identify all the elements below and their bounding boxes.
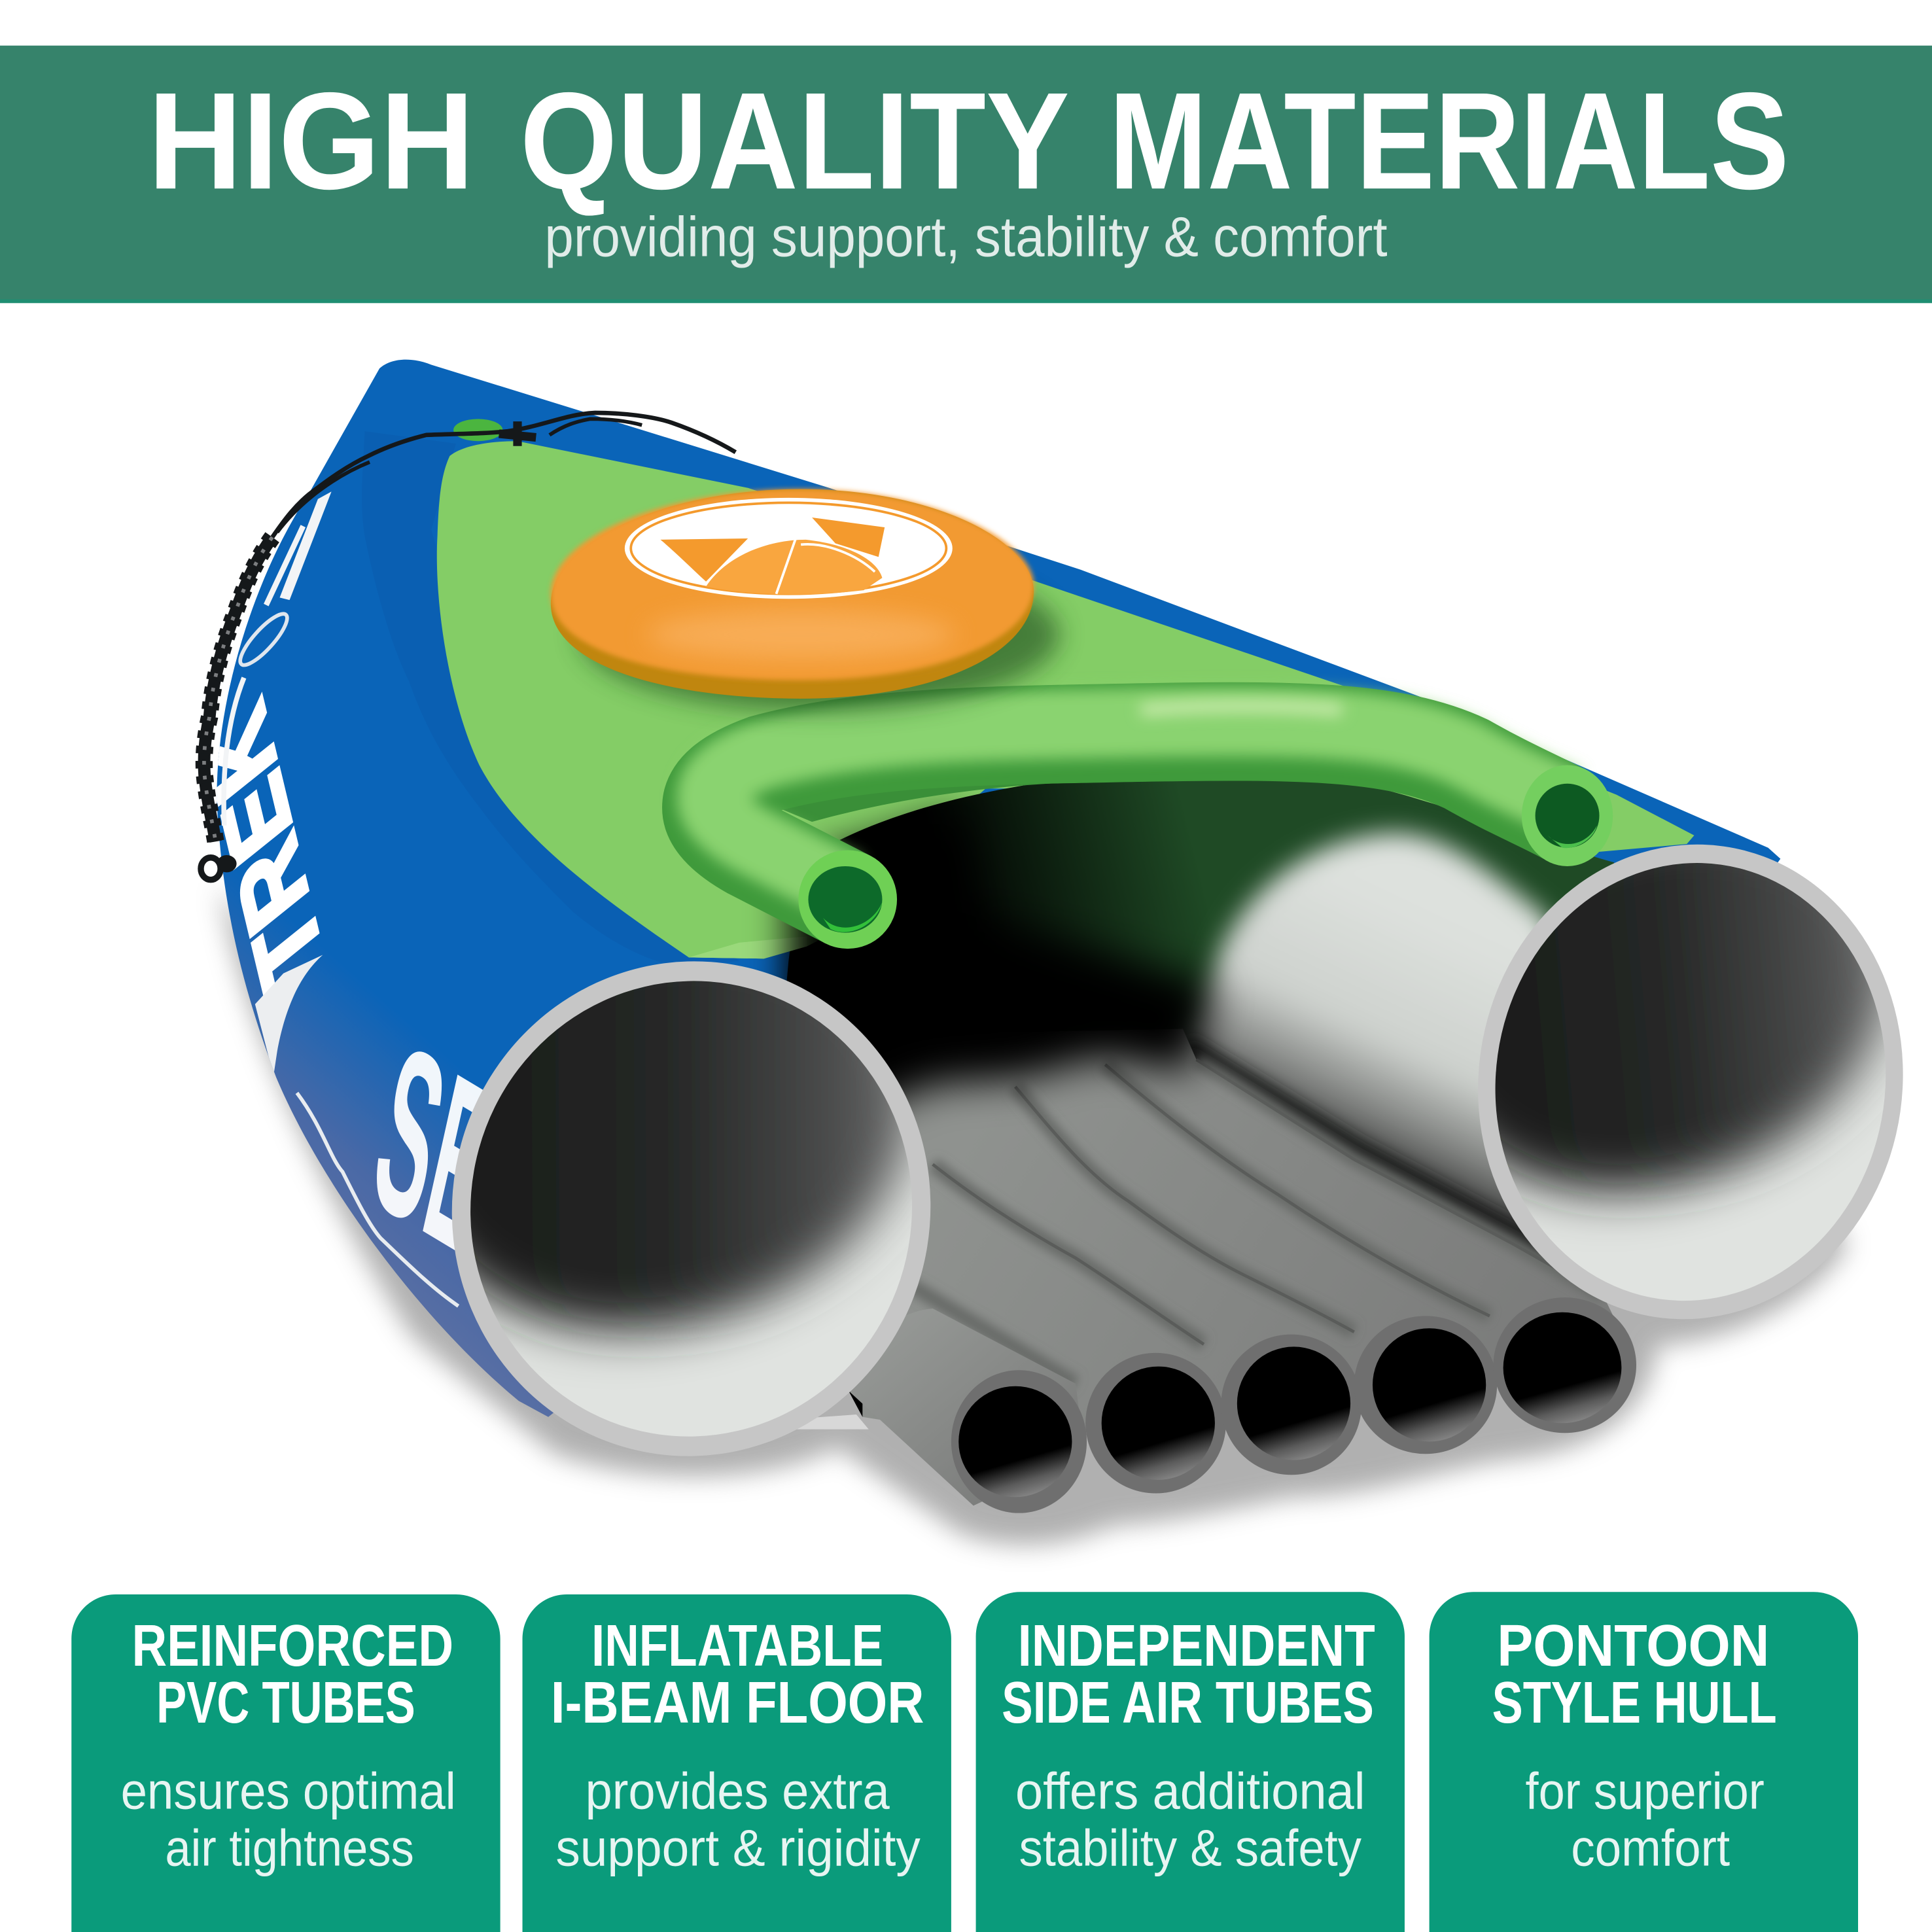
card heading: INDEPENDENT [1018,1613,1375,1679]
card heading [551,1613,924,1736]
tube end 4 [1354,1316,1497,1454]
hull inner band [362,431,739,966]
chain lobes [204,537,272,841]
card description: comfort [1571,1818,1730,1876]
card heading: PONTOON [1497,1613,1769,1679]
card: independent side air tubes [976,1592,1405,1932]
tube highlight [1146,706,1337,710]
card: reinforced pvc tubes [71,1594,501,1932]
tube end 2 [1085,1353,1226,1494]
hull body [217,360,1780,1417]
chain beads [204,537,272,841]
left pvc tube opening [359,870,970,1494]
card description [555,1762,921,1876]
tube end 1 [951,1370,1087,1513]
green deck [437,441,1695,958]
card: pontoon style hull [1430,1592,1858,1932]
tube side shading [911,1060,1603,1384]
card heading [1002,1613,1375,1736]
tube separators [933,1060,1603,1344]
kayak cross-section illustration [186,360,1932,1545]
deck front lip [616,850,862,958]
card heading: PVC TUBES [156,1670,415,1736]
right pvc tube opening [1479,844,1903,1319]
title: MATERIALS [1109,63,1789,218]
title: QUALITY [520,63,1070,218]
green tube end right [1522,765,1613,866]
card description [1015,1762,1365,1876]
graphic bars [264,491,332,606]
disc underside [551,489,1034,699]
i-beam floor tube bodies [850,1029,1626,1505]
inner air tube [1170,833,1626,1247]
drop shadows [219,887,1848,1545]
hull edge line [224,678,244,826]
subtitle: providing support, stability & comfort [544,206,1388,269]
card description: support & rigidity [555,1818,921,1876]
title [148,63,1789,218]
tube end 5 [1494,1297,1636,1433]
rope knot [217,855,237,872]
tube end 3 [1221,1335,1361,1475]
card heading: SIDE AIR TUBES [1002,1670,1374,1736]
disc face [551,489,1034,680]
card description: provides extra [586,1762,890,1820]
card description [1526,1762,1765,1876]
rope loop [201,858,220,880]
card: inflatable i-beam floor [523,1594,951,1932]
rope toggle [499,421,536,446]
card heading [132,1613,453,1736]
inner tube contact shadow [1183,1047,1589,1282]
card description: ensures optimal [121,1762,456,1820]
green side air tube [711,706,1568,900]
green tube underside [776,764,1109,822]
disc logo [625,498,953,599]
bow rope and chain [201,413,735,880]
dark hull interior [764,771,1614,1417]
card heading: REINFORCED [132,1613,453,1679]
card description: air tightness [165,1818,414,1876]
lettering strip [255,955,323,1076]
title: HIGH [148,63,474,218]
disc highlight [647,610,955,659]
card description: stability & safety [1019,1818,1361,1876]
card description: offers additional [1015,1762,1365,1820]
card heading: I-BEAM FLOOR [551,1670,924,1736]
card heading [1492,1613,1777,1736]
card description: for superior [1526,1762,1765,1820]
wave line [297,1093,459,1306]
card heading: INFLATABLE [591,1613,883,1679]
lettering: lower side: SE [357,992,514,1307]
strip under left tube [788,1414,869,1430]
card heading: STYLE HULL [1492,1670,1777,1736]
green tube end left [798,850,897,949]
interior shadow over floor tubes [788,862,1214,1115]
chain [204,537,272,841]
floor tube ends [951,1297,1636,1513]
short tube body [850,1308,1084,1505]
deck valve patch [453,419,502,441]
lettering: upper side: TREK [186,682,340,1015]
hull branding graphics [186,491,514,1307]
header banner [0,46,1932,303]
orange valve disc [551,489,1060,711]
graphic swoosh [238,612,289,667]
card description [121,1762,456,1876]
